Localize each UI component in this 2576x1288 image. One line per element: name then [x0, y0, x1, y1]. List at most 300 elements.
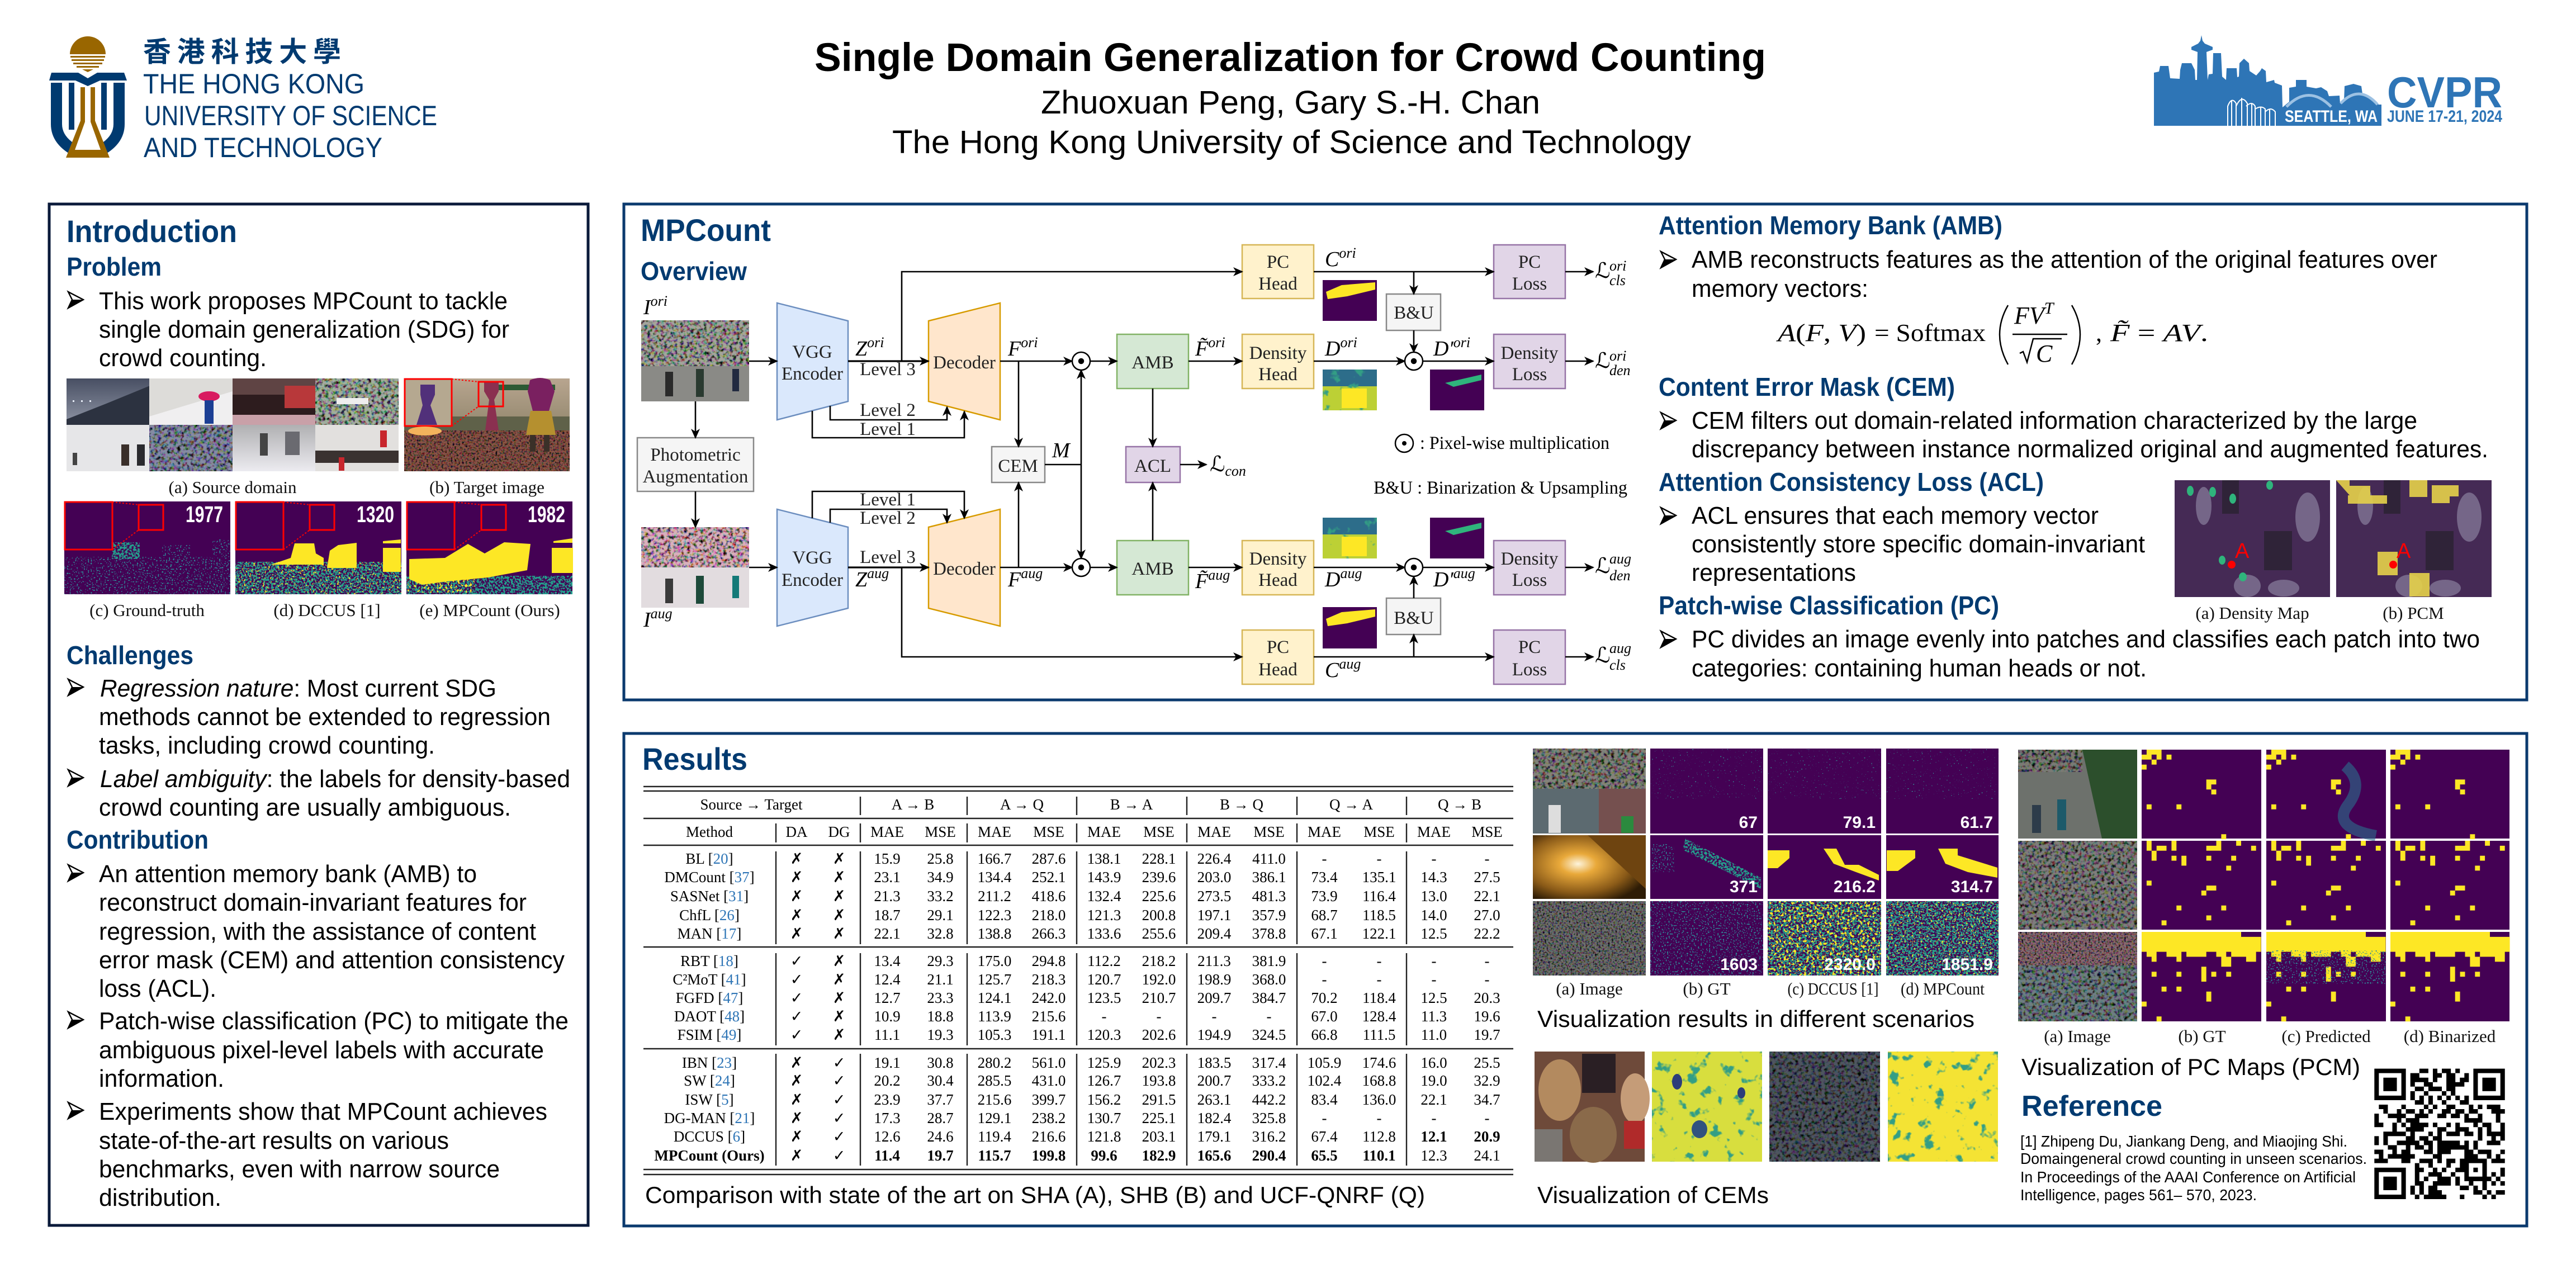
block: PC loss upper: PC: [1518, 252, 1541, 272]
table: comparison: -: [1485, 971, 1489, 988]
table: comparison: -: [1431, 971, 1437, 988]
figure: DCCUS density map: 1320: [357, 501, 394, 527]
labels: levels: Level 3: [860, 359, 916, 380]
text: challenges: methods cannot be extended to regression: [99, 703, 551, 731]
table: comparison: ✗: [833, 888, 845, 905]
block: decoder upper: [929, 303, 1000, 420]
table: comparison: ✗: [790, 1110, 803, 1127]
panel: MPCount: [624, 204, 2527, 700]
figure: ground-truth density map: [64, 501, 230, 594]
row 3: 1851.9: [1942, 955, 1993, 974]
captions: visualization grid: (d) MPCount: [1901, 979, 1985, 998]
table: comparison: 225.6: [1142, 888, 1176, 905]
row 1: 61.7: [1961, 813, 1993, 832]
table: comparison: -: [1376, 971, 1382, 988]
captions: visualization grid: [1556, 979, 1985, 998]
table: comparison: 199.8: [1032, 1147, 1066, 1164]
block: density head upper: Density: [1249, 343, 1307, 363]
table: comparison: 218.2: [1142, 953, 1176, 969]
table: comparison: 65.5: [1311, 1147, 1338, 1164]
block: density loss lower: Density: [1501, 549, 1559, 569]
box: photometric augmentation: [637, 438, 754, 491]
table: comparison: 125.7: [978, 971, 1011, 988]
labels: losses: cls: [1609, 657, 1626, 673]
table: comparison: ✓: [833, 1054, 845, 1072]
formula: attention: FV: [2014, 302, 2044, 329]
table: comparison: -: [1212, 1008, 1216, 1025]
text: AMB description: AMB reconstructs features as the attention of the original features over: [1692, 246, 2437, 273]
table: comparison: 266.3: [1032, 925, 1066, 942]
text: problem: single domain generalization (SDG) for: [99, 316, 509, 343]
table: comparison: 182.9: [1142, 1147, 1176, 1164]
captions: PC maps grid: (b) GT: [2178, 1026, 2226, 1046]
table: comparison: 291.5: [1142, 1091, 1176, 1108]
table: comparison: A → Q: [1000, 796, 1044, 813]
table: comparison: 34.7: [1474, 1091, 1500, 1108]
table: comparison: 198.9: [1197, 971, 1231, 988]
table: comparison: A → B: [892, 796, 934, 813]
table: comparison: 238.2: [1032, 1110, 1066, 1126]
table: comparison: 273.5: [1197, 888, 1231, 905]
section: CEM: CEM filters out domain-related information characterized by the large: [1692, 407, 2417, 434]
caption: source domain: (a) Source domain: [169, 477, 297, 497]
caption: comparison table: Comparison with state of the art on SHA (A), SHB (B) and UCF-QNRF (Q): [645, 1182, 1425, 1208]
text: contribution: error mask (CEM) and attention consistency: [99, 946, 565, 974]
table: comparison: ✓: [833, 1110, 845, 1127]
table: comparison: 202.6: [1142, 1026, 1176, 1043]
block: AMB lower: [1117, 541, 1188, 595]
table: comparison: -: [1376, 850, 1382, 867]
labels: feature symbols: ori: [1340, 334, 1357, 351]
table: comparison: 73.4: [1311, 869, 1338, 886]
formula: attention: T: [2044, 299, 2055, 318]
table: comparison: -: [1431, 850, 1437, 867]
table: comparison: 174.6: [1362, 1054, 1396, 1071]
labels: feature symbols: D: [1325, 337, 1340, 361]
row 1: 67: [1739, 813, 1758, 832]
block: VGG encoder upper: Encoder: [782, 364, 843, 384]
table: comparison: 14.0: [1420, 907, 1447, 924]
Chinese name: 香港科技大學: [143, 30, 341, 70]
table: comparison: MSE: [1471, 823, 1503, 840]
table: comparison: 156.2: [1087, 1091, 1121, 1108]
table: comparison: 368.0: [1252, 971, 1286, 988]
English name: UNIVERSITY OF SCIENCE: [144, 100, 437, 131]
table: comparison: 381.9: [1252, 953, 1286, 969]
table: comparison: DMCount [37]: [664, 869, 755, 886]
table: comparison: 19.3: [927, 1026, 954, 1043]
table: comparison: 192.0: [1142, 971, 1176, 988]
icon: HKUST emblem: [49, 36, 127, 158]
block: PC head lower: Head: [1258, 660, 1298, 680]
block: B&U lower: [1386, 598, 1441, 634]
table: comparison: 22.1: [1420, 1091, 1447, 1108]
table: comparison: 24.1: [1474, 1147, 1500, 1164]
section: AMB: [1659, 211, 2437, 367]
table: comparison: 121.3: [1087, 907, 1121, 924]
section: CEM: [1659, 372, 2488, 463]
text: reference: Intelligence, pages 561– 570, 2023.: [2020, 1186, 2257, 1204]
caption: CEMs: Visualization of CEMs: [1537, 1182, 1769, 1208]
table: comparison: 12.1: [1420, 1128, 1447, 1145]
table: comparison: 112.8: [1362, 1128, 1396, 1145]
affiliation: The Hong Kong University of Science and Technology: [892, 124, 1691, 160]
block: CEM: [992, 447, 1045, 482]
table: comparison: 418.6: [1032, 888, 1066, 905]
table: comparison: MSE: [925, 823, 956, 840]
table: comparison: MAE: [1197, 823, 1231, 840]
table: comparison: 105.9: [1308, 1054, 1341, 1071]
figure: visualization grid: [1533, 749, 1999, 976]
table: comparison: 290.4: [1252, 1147, 1286, 1164]
block: VGG encoder lower: VGG: [792, 548, 832, 568]
block: AMB upper: AMB: [1131, 353, 1174, 373]
labels: feature symbols: Z: [855, 568, 867, 591]
icon: QR code: [2374, 1069, 2505, 1199]
table: comparison: MAN [17]: [678, 925, 741, 942]
labels: feature symbols: ori: [867, 334, 884, 351]
English name: [143, 68, 437, 163]
labels: feature symbols: D: [1325, 568, 1340, 591]
table: comparison: 242.0: [1032, 989, 1066, 1006]
section: CEM: discrepancy between instance normalized original and augmented features.: [1692, 435, 2488, 463]
table: comparison: 23.1: [874, 869, 901, 886]
table: comparison: 18.8: [927, 1008, 954, 1025]
labels: losses: ℒ: [1210, 452, 1225, 476]
table: comparison: 211.3: [1197, 953, 1231, 969]
table: comparison: Q → B: [1438, 796, 1481, 813]
table: comparison: 120.3: [1087, 1026, 1121, 1043]
table: comparison: 12.5: [1420, 989, 1447, 1006]
table: comparison: ✗: [833, 989, 845, 1007]
table: comparison: DAOT [48]: [674, 1008, 745, 1025]
section: ACL: consistently store specific domain-invariant: [1692, 531, 2145, 558]
table: comparison: 28.7: [927, 1110, 954, 1126]
image: original input: [641, 320, 749, 401]
table: comparison: ChfL [26]: [679, 907, 740, 924]
table: comparison: 21.1: [927, 971, 954, 988]
labels: losses: ℒ: [1595, 348, 1610, 373]
table: comparison: 27.0: [1474, 907, 1500, 924]
table: comparison: Q → A: [1329, 796, 1374, 813]
table: comparison: 128.4: [1362, 1008, 1396, 1025]
table: comparison: -: [1485, 953, 1489, 969]
labels: losses: aug: [1609, 640, 1631, 656]
block: density loss lower: [1494, 541, 1565, 595]
table: comparison: 12.4: [874, 971, 901, 988]
poster title: Single Domain Generalization for Crowd Counting: [815, 36, 1766, 80]
table: comparison: ✗: [790, 925, 803, 943]
block: PC loss upper: Loss: [1512, 274, 1547, 294]
captions: density map vs PCM: [2195, 603, 2444, 623]
caption: visualization results: Visualization results in different scenarios: [1537, 1006, 1974, 1032]
table: comparison: 442.2: [1252, 1091, 1286, 1108]
table: comparison: 30.8: [927, 1054, 954, 1071]
table: comparison: 113.9: [978, 1008, 1011, 1025]
table: comparison: 126.7: [1087, 1072, 1121, 1089]
table: comparison: 399.7: [1032, 1091, 1066, 1108]
table: comparison: ✗: [790, 1128, 803, 1145]
figure: density map vs PCM: A: [2235, 539, 2250, 563]
table: comparison: ✗: [833, 869, 845, 886]
figure: MPCount density map: [406, 501, 573, 594]
table: comparison: 561.0: [1032, 1054, 1066, 1071]
table: comparison: ✗: [833, 953, 845, 970]
labels: feature symbols: C: [1325, 248, 1339, 271]
CVPR 2024 logo: [2154, 35, 2502, 126]
block: PC head upper: PC: [1267, 252, 1289, 272]
table: comparison: 316.2: [1252, 1128, 1286, 1145]
section: ACL: representations: [1692, 559, 1856, 586]
captions: PC maps grid: (a) Image: [2044, 1026, 2111, 1046]
section: CEM: Content Error Mask (CEM): [1659, 372, 1955, 401]
block: B&U upper: B&U: [1394, 303, 1434, 323]
table: comparison: 134.4: [978, 869, 1012, 886]
HKUST logo: [49, 30, 437, 163]
table: comparison: 122.1: [1362, 925, 1396, 942]
table: comparison: 294.8: [1032, 953, 1066, 969]
text: problem: crowd counting.: [99, 344, 267, 372]
table: comparison: ISW [5]: [685, 1091, 734, 1108]
labels: losses: cls: [1609, 272, 1626, 288]
table: comparison: -: [1376, 1110, 1382, 1126]
text: reference: [2020, 1133, 2367, 1204]
table: comparison: 215.6: [978, 1091, 1011, 1108]
English name: THE HONG KONG: [143, 68, 364, 100]
labels: feature symbols: aug: [1340, 565, 1362, 581]
text: contribution: reconstruct domain-invariant features for: [99, 889, 527, 916]
text: contribution: benchmarks, even with narrow source: [99, 1156, 500, 1183]
captions: density maps: (e) MPCount (Ours): [419, 600, 560, 620]
table: comparison: 226.4: [1197, 850, 1232, 867]
block: PC loss lower: PC: [1518, 637, 1541, 657]
captions: density map vs PCM: (b) PCM: [2383, 603, 2444, 623]
labels: feature symbols: ori: [1453, 334, 1470, 351]
table: comparison: 325.8: [1252, 1110, 1286, 1126]
table: comparison: FGFD [47]: [676, 989, 743, 1006]
row 3: 1603: [1720, 955, 1758, 974]
table: comparison: 22.1: [1474, 888, 1500, 905]
labels: feature symbols: C: [1325, 659, 1339, 682]
figure: target image: [404, 378, 570, 471]
block: density loss upper: Density: [1501, 343, 1559, 363]
text: contribution: distribution.: [99, 1184, 221, 1211]
table: comparison: -: [1431, 953, 1437, 969]
table: comparison: 105.3: [978, 1026, 1011, 1043]
table: comparison: 32.9: [1474, 1072, 1500, 1089]
table: comparison: -: [1485, 850, 1489, 867]
legend: operators: [1374, 433, 1627, 498]
title block: [815, 36, 1766, 160]
thumbnails: PC and density maps: [1323, 280, 1484, 648]
table: comparison: ✓: [833, 1072, 845, 1090]
table: comparison: IBN [23]: [682, 1054, 737, 1071]
table: comparison: 19.1: [874, 1054, 901, 1071]
labels: levels: Level 2: [860, 400, 916, 420]
text: AMB description: memory vectors:: [1692, 275, 1868, 302]
table: comparison: MAE: [870, 823, 904, 840]
table: comparison: 12.6: [874, 1128, 901, 1145]
text: contribution: information.: [99, 1065, 224, 1092]
text: contribution: ambiguous pixel-level labels with accurate: [99, 1036, 544, 1064]
table: comparison: -: [1322, 971, 1327, 988]
table: comparison: 17.3: [874, 1110, 901, 1126]
label: I ori: I: [643, 296, 651, 319]
table: comparison: ✗: [833, 971, 845, 988]
row 2: 216.2: [1834, 878, 1876, 896]
table: comparison: MSE: [1253, 823, 1285, 840]
labels: levels: [860, 359, 916, 567]
table: comparison: 13.0: [1420, 888, 1447, 905]
icon: bridge arches: [2286, 94, 2378, 107]
captions: PC maps grid: [2044, 1026, 2496, 1046]
table: comparison: 183.5: [1197, 1054, 1231, 1071]
captions: PC maps grid: (d) Binarized: [2404, 1026, 2496, 1046]
table: comparison: ✗: [790, 907, 803, 924]
authors: Zhuoxuan Peng, Gary S.-H. Chan: [1041, 84, 1540, 121]
captions: visualization grid: (c) DCCUS [1]: [1788, 979, 1878, 998]
block: density head lower: Density: [1249, 549, 1307, 569]
formula: attention: A(F, V): [1775, 319, 1866, 347]
table: comparison: 12.3: [1420, 1147, 1447, 1164]
row 1: 79.1: [1843, 813, 1876, 832]
figure: density map vs PCM: A: [2397, 539, 2411, 563]
table: comparison: 13.4: [874, 953, 901, 969]
table: comparison: MSE: [1143, 823, 1175, 840]
table: comparison: 215.6: [1032, 1008, 1066, 1025]
heading: contribution: Contribution: [67, 825, 209, 854]
labels: feature symbols: Z: [855, 337, 867, 361]
section: AMB: Attention Memory Bank (AMB): [1659, 211, 2002, 240]
image: augmented input: [641, 527, 749, 608]
block: PC head lower: PC: [1267, 637, 1289, 657]
table: comparison: 27.5: [1474, 869, 1500, 886]
labels: feature symbols: ori: [1021, 334, 1038, 351]
table: comparison: ✓: [833, 1091, 845, 1109]
table: comparison: 110.1: [1362, 1147, 1396, 1164]
captions: visualization grid: (a) Image: [1556, 979, 1623, 998]
section: ACL: Attention Consistency Loss (ACL): [1659, 467, 2044, 496]
block: ACL: ACL: [1134, 456, 1171, 476]
text: reference: [1] Zhipeng Du, Jiankang Deng, and Miaojing Shi.: [2020, 1133, 2347, 1150]
table: comparison: 112.2: [1087, 953, 1121, 969]
table: comparison: 120.7: [1087, 971, 1121, 988]
table: comparison: ✓: [790, 953, 803, 970]
table: comparison: 122.3: [978, 907, 1011, 924]
labels: levels: Level 1: [860, 490, 916, 510]
table: comparison: B → A: [1110, 796, 1153, 813]
text: AMB description: [1661, 246, 2437, 302]
block: density head upper: [1242, 334, 1314, 389]
block: VGG encoder lower: Encoder: [782, 570, 843, 590]
heading: challenges: Challenges: [67, 641, 193, 670]
labels: losses: ori: [1609, 258, 1626, 274]
block: decoder lower: [929, 509, 1000, 626]
table: comparison: 20.9: [1474, 1128, 1500, 1145]
label: I aug: I: [643, 608, 651, 632]
formula: attention: ,: [2096, 319, 2102, 347]
table: comparison: 197.1: [1197, 907, 1231, 924]
table: comparison: 481.3: [1252, 888, 1286, 905]
table: comparison: ✗: [790, 1091, 803, 1109]
section: ACL: ACL ensures that each memory vector: [1692, 502, 2099, 529]
table: comparison: 209.7: [1197, 989, 1231, 1006]
formula: attention: F̃ = AV .: [2110, 319, 2208, 347]
table: comparison: 202.3: [1142, 1054, 1176, 1071]
table: comparison: 209.4: [1197, 925, 1232, 942]
table: comparison: 83.4: [1311, 1091, 1338, 1108]
table: comparison: 25.8: [927, 850, 954, 867]
table: comparison: 29.3: [927, 953, 954, 969]
labels: losses: den: [1609, 362, 1631, 378]
heading: problem: Problem: [67, 252, 162, 281]
section: ACL: [1659, 467, 2145, 586]
block: density loss lower: Loss: [1512, 570, 1547, 590]
table: comparison: 218.3: [1032, 971, 1066, 988]
row 2: 314.7: [1951, 878, 1993, 896]
table: comparison: DG-MAN [21]: [664, 1110, 755, 1126]
table: comparison: 166.7: [978, 850, 1011, 867]
panel: introduction: [49, 204, 588, 1225]
labels: feature symbols: F: [1008, 568, 1021, 591]
table: comparison: 99.6: [1091, 1147, 1117, 1164]
block: density loss upper: Loss: [1512, 364, 1547, 385]
block: PC head upper: Head: [1258, 274, 1298, 294]
table: comparison: 218.0: [1032, 907, 1066, 924]
table: comparison: 179.1: [1197, 1128, 1231, 1145]
label: I ori: ori: [651, 293, 667, 309]
block: B&U upper: [1386, 294, 1441, 330]
table: comparison: 10.9: [874, 1008, 901, 1025]
table: comparison: 30.4: [927, 1072, 954, 1089]
table: comparison: 121.8: [1087, 1128, 1121, 1145]
labels: feature symbols: aug: [1453, 565, 1475, 581]
table: comparison: 129.1: [978, 1110, 1011, 1126]
figure: source domain tiles: [67, 378, 399, 471]
table: comparison: ✗: [790, 1147, 803, 1164]
figure: MPCount density map: 1982: [528, 501, 565, 527]
table: comparison: 285.5: [978, 1072, 1011, 1089]
table: comparison: 118.4: [1362, 989, 1396, 1006]
table: comparison: SASNet [31]: [670, 888, 749, 905]
heading: results: Results: [642, 741, 747, 776]
table: comparison: 18.7: [874, 907, 901, 924]
table: comparison: 22.1: [874, 925, 901, 942]
row 2: 371: [1730, 878, 1758, 896]
table: comparison: 203.1: [1142, 1128, 1176, 1145]
CVPR wordmark: CVPR: [2387, 68, 2502, 117]
table: comparison: MAE: [1087, 823, 1121, 840]
table: comparison: 203.0: [1197, 869, 1231, 886]
text: contribution: [68, 860, 569, 1211]
table: comparison: ✗: [833, 850, 845, 868]
labels: levels: Level 2: [860, 508, 916, 528]
block: B&U lower: B&U: [1394, 608, 1434, 628]
table: comparison: 411.0: [1252, 850, 1286, 867]
labels: feature symbols: aug: [867, 565, 889, 581]
table: comparison: 182.4: [1197, 1110, 1232, 1126]
icon: fountain arches: [2228, 98, 2275, 126]
table: comparison: 211.2: [978, 888, 1011, 905]
table: comparison: 165.6: [1197, 1147, 1231, 1164]
table: comparison: 37.7: [927, 1091, 954, 1108]
labels: feature symbols: aug: [1208, 567, 1230, 583]
table: comparison: 67.0: [1311, 1008, 1338, 1025]
table: comparison: ✗: [790, 869, 803, 886]
table: comparison: MSE: [1363, 823, 1395, 840]
table: comparison: 23.9: [874, 1091, 901, 1108]
formula: attention: C: [2036, 340, 2053, 367]
